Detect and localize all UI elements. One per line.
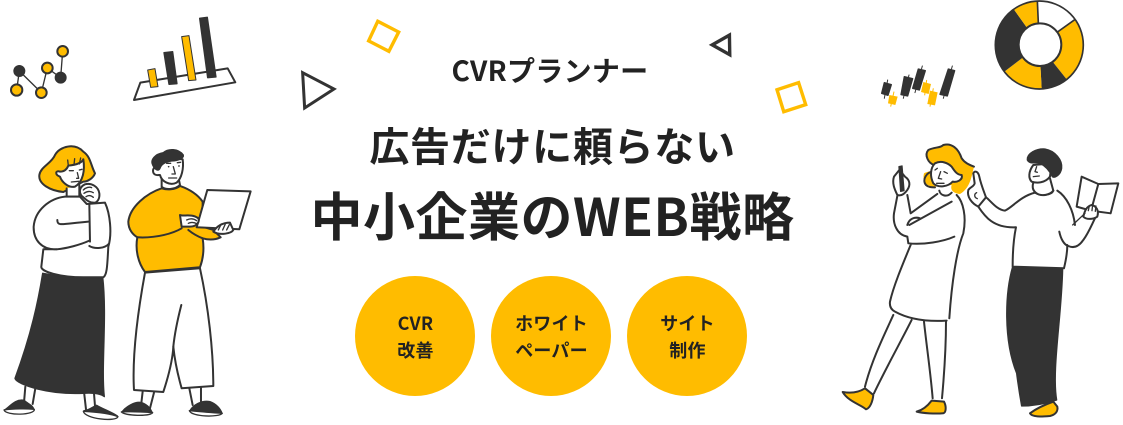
heading line 1: 広告だけに頼らない bbox=[369, 115, 736, 173]
illustration: man with book bbox=[968, 149, 1118, 416]
icon: outlined triangle large bbox=[303, 73, 334, 108]
icon: dot line chart bbox=[11, 46, 68, 98]
badge: white paper: ホワイト bbox=[515, 310, 588, 336]
icon: candlestick chart bbox=[882, 66, 955, 107]
badge: CVR improvement: 改善 bbox=[397, 337, 434, 363]
badge: white paper: ペーパー bbox=[515, 337, 588, 363]
badge: white paper bbox=[491, 276, 611, 396]
icon: yellow square left bbox=[369, 21, 399, 51]
badge: site production: サイト bbox=[660, 310, 715, 336]
eyebrow: product name: CVRプランナー bbox=[452, 50, 648, 90]
heading line 2: 中小企業のWEB戦略 bbox=[311, 176, 794, 251]
badge: site production: 制作 bbox=[669, 337, 706, 363]
icon: small triangle right bbox=[712, 35, 730, 55]
badge: CVR improvement bbox=[355, 276, 475, 396]
icon: bar chart on platform bbox=[134, 17, 235, 100]
icon: donut chart bbox=[994, 0, 1084, 90]
icon: yellow square right bbox=[777, 83, 806, 112]
badge: site production bbox=[627, 276, 747, 396]
illustration: woman thinking bbox=[4, 146, 118, 419]
badge: CVR improvement: CVR bbox=[398, 310, 433, 336]
illustration: man with laptop bbox=[121, 150, 251, 416]
illustration: woman with smartphone bbox=[843, 144, 974, 414]
